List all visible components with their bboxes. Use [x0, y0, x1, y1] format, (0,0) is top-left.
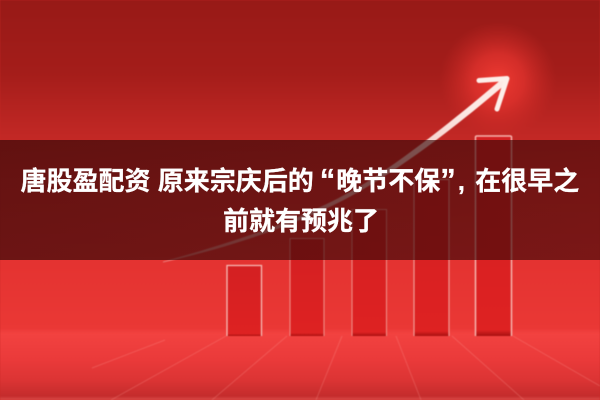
dark title band — [0, 140, 600, 260]
bar 1 — [227, 265, 262, 336]
title: 唐股盈配资 原来宗庆后的“晚节不保”, 在很早之 — [20, 162, 579, 197]
bar 4 — [414, 179, 449, 336]
rising arrow — [163, 78, 507, 262]
title: 前就有预兆了 — [223, 206, 379, 236]
bar 3 — [352, 209, 386, 336]
bar 2 — [290, 238, 324, 336]
title — [20, 162, 579, 236]
bar 5 — [476, 136, 512, 336]
